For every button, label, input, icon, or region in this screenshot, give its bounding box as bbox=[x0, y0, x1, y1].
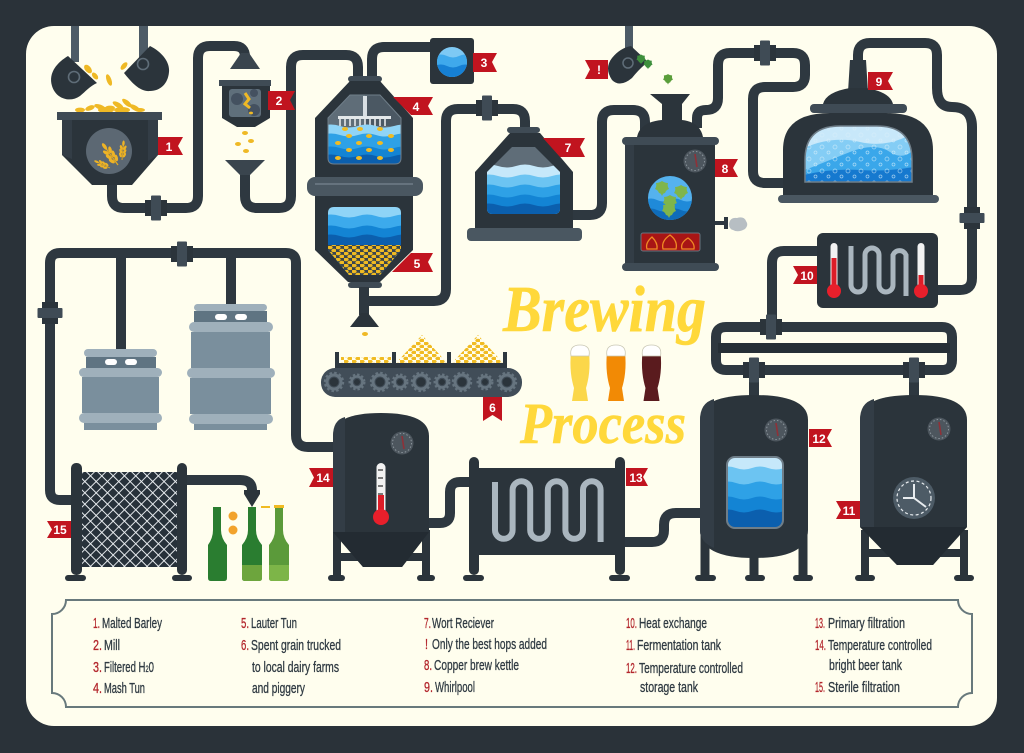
legend column 2: Lauter Tun bbox=[251, 615, 297, 632]
legend column 2: to local dairy farms bbox=[252, 659, 339, 676]
pipe valves bbox=[38, 40, 984, 382]
legend column 5: Sterile filtration bbox=[828, 679, 900, 696]
bottles bbox=[208, 505, 289, 581]
legend column 1: 4. bbox=[93, 680, 102, 697]
cone over mill bbox=[230, 53, 260, 69]
flag 11: 11 bbox=[843, 504, 856, 518]
vessel 9: whirlpool bbox=[778, 60, 939, 203]
legend column 2: and piggery bbox=[252, 680, 305, 697]
tank 11: fermentation tank bbox=[855, 395, 974, 581]
flag 7: 7 bbox=[565, 141, 572, 155]
flag hops: ! bbox=[597, 63, 601, 77]
flag 2 bbox=[268, 91, 295, 110]
legend frame bbox=[52, 600, 972, 707]
legend column 5: bright beer tank bbox=[829, 657, 902, 674]
legend column 1: Mash Tun bbox=[104, 680, 145, 697]
legend column 1: Mill bbox=[104, 637, 120, 654]
pipes network bbox=[50, 43, 972, 542]
legend column 4: Fermentation tank bbox=[637, 637, 721, 654]
flag 2: 2 bbox=[276, 94, 283, 108]
legend column 4 bbox=[626, 615, 743, 696]
flag 14: 14 bbox=[316, 471, 330, 485]
kettle 8 bbox=[622, 94, 747, 271]
large keg bbox=[187, 304, 275, 430]
tank 3: filtered water bbox=[430, 38, 474, 84]
filter 13: primary filtration bbox=[463, 457, 630, 581]
legend column 4: storage tank bbox=[640, 679, 698, 696]
vessel 4: mash tun bbox=[315, 76, 413, 178]
legend column 3: Wort Reciever bbox=[432, 615, 494, 632]
funnel bbox=[225, 160, 265, 175]
legend column 1: Filtered H20 bbox=[104, 659, 154, 676]
flag 10 bbox=[793, 266, 817, 284]
legend column 2: Spent grain trucked bbox=[251, 637, 341, 654]
flag 13: 13 bbox=[629, 471, 643, 485]
flag 8 bbox=[715, 159, 738, 177]
flag 5 bbox=[392, 253, 433, 272]
legend column 3: 9. bbox=[424, 679, 433, 696]
legend column 5 bbox=[815, 615, 932, 696]
bottling nozzle bbox=[244, 490, 260, 507]
legend column 3: 7. bbox=[424, 615, 431, 632]
legend column 1: 2. bbox=[93, 637, 102, 654]
heat exchanger 10 bbox=[817, 233, 938, 308]
legend column 5: 13. bbox=[815, 615, 825, 632]
flag 15 bbox=[47, 521, 71, 538]
legend column 2: 6. bbox=[241, 637, 249, 654]
flag 4 bbox=[393, 97, 433, 115]
flag 3 bbox=[473, 53, 497, 72]
legend column 4: 12. bbox=[626, 660, 637, 677]
vessel 5: lauter tun bbox=[307, 177, 423, 327]
legend column 3: 8. bbox=[424, 657, 432, 674]
legend column 5: Primary filtration bbox=[828, 615, 905, 632]
flag 8: 8 bbox=[722, 162, 729, 176]
flag 9: 9 bbox=[876, 75, 883, 89]
flag 3: 3 bbox=[481, 56, 488, 70]
legend column 5: 15. bbox=[815, 679, 825, 696]
flag 7 bbox=[543, 138, 585, 157]
flag 1 bbox=[158, 137, 183, 155]
beer glasses bbox=[570, 345, 661, 401]
flag 14 bbox=[309, 468, 333, 487]
flag 12: 12 bbox=[812, 432, 826, 446]
flag 12 bbox=[809, 429, 832, 447]
hopper 1: malted barley bbox=[57, 97, 162, 185]
filter 15: sterile filtration bbox=[65, 463, 192, 581]
legend column 2 bbox=[241, 615, 341, 697]
title: Brewing: Brewing bbox=[502, 273, 706, 346]
vessel 7: wort receiver bbox=[467, 127, 582, 241]
legend column 5: 14. bbox=[815, 637, 826, 654]
flag 6: 6 bbox=[489, 401, 496, 415]
conveyor 6 bbox=[321, 332, 522, 397]
legend column 1: Malted Barley bbox=[102, 615, 162, 632]
legend column 3 bbox=[424, 615, 547, 696]
flag 13 bbox=[626, 468, 648, 486]
flag 15: 15 bbox=[53, 523, 67, 537]
flag 1: 1 bbox=[166, 140, 173, 154]
flag 5: 5 bbox=[414, 257, 421, 271]
flag 11 bbox=[836, 501, 860, 519]
legend column 3: Whirlpool bbox=[435, 679, 475, 696]
mill 2 bbox=[219, 80, 271, 127]
legend column 3: ! bbox=[425, 636, 428, 653]
falling grain bbox=[235, 131, 254, 153]
legend column 1: 3. bbox=[93, 659, 102, 676]
tank 12: storage tank bbox=[695, 395, 813, 581]
flag 4: 4 bbox=[413, 100, 420, 114]
legend column 1 bbox=[93, 615, 162, 697]
legend column 4: 11. bbox=[626, 637, 635, 654]
icon: grain scoops bbox=[51, 26, 169, 99]
hops scoop bbox=[608, 26, 673, 85]
title: Process: Process bbox=[519, 391, 686, 456]
legend column 4: Temperature controlled bbox=[639, 660, 743, 677]
tank 14: bright beer tank bbox=[328, 413, 435, 581]
legend column 5: Temperature controlled bbox=[828, 637, 932, 654]
small keg bbox=[79, 349, 162, 430]
legend column 4: Heat exchange bbox=[639, 615, 707, 632]
flag hops bbox=[585, 60, 608, 79]
legend column 2: 5. bbox=[241, 615, 249, 632]
legend column 3: Only the best hops added bbox=[432, 636, 547, 653]
legend column 1: 1. bbox=[93, 615, 100, 632]
legend column 4: 10. bbox=[626, 615, 637, 632]
legend column 3: Copper brew kettle bbox=[434, 657, 519, 674]
flag 9 bbox=[868, 72, 893, 90]
flag 10: 10 bbox=[800, 269, 814, 283]
flag 6 bbox=[483, 397, 502, 421]
